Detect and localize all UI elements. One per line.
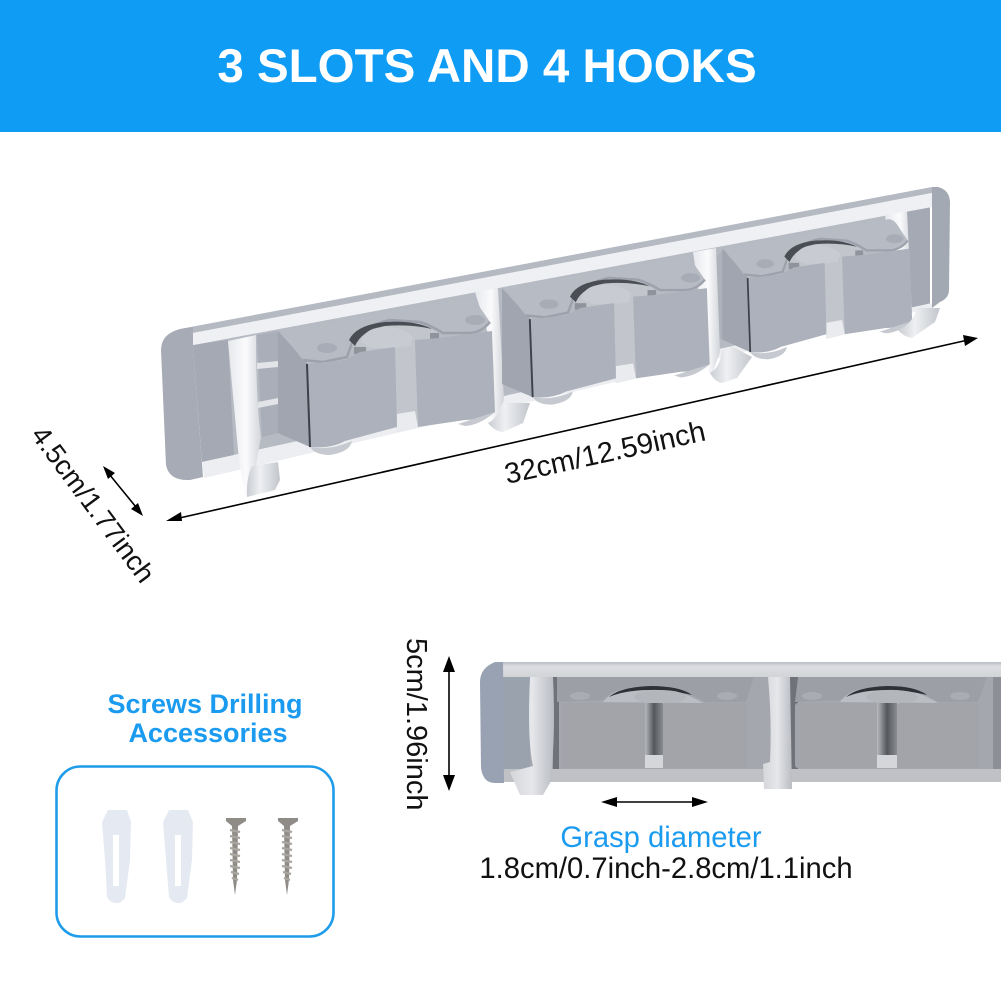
- length label: 32cm/12.59inch: [502, 416, 708, 491]
- hook 3 band: [693, 248, 720, 375]
- title: 3 SLOTS AND 4 HOOKS: [217, 40, 757, 93]
- right edge strip: [993, 677, 1001, 769]
- length dimension arrow: [166, 335, 978, 521]
- left end cap: [161, 327, 203, 480]
- accessories heading: Screws Drilling: [107, 689, 303, 719]
- screw 1: [226, 818, 246, 895]
- left jaw: [562, 703, 645, 768]
- hook 2 foot: [488, 403, 530, 432]
- hook 4 band: [885, 211, 912, 330]
- hook 4 foot: [898, 308, 940, 338]
- width dimension arrow: [103, 466, 143, 516]
- hook 1 band: [228, 335, 261, 497]
- back panel: [193, 207, 930, 462]
- main product: wall rack with three clips and hooks: [161, 187, 950, 497]
- left jaw: [795, 703, 877, 768]
- wall anchor 2: [163, 810, 193, 903]
- front view product: [480, 662, 1001, 795]
- title banner: [0, 0, 1001, 132]
- front rail and back: [498, 662, 1001, 677]
- accessories box: [56, 766, 334, 936]
- clip 1: [278, 298, 495, 455]
- right end cap: [932, 187, 950, 308]
- grasp arrow: [601, 797, 708, 807]
- screw 2: [278, 818, 298, 895]
- hook 1 foot: [247, 462, 280, 497]
- height dimension arrow: [443, 656, 455, 791]
- top rail strip: [180, 187, 932, 333]
- front clip 2: [795, 677, 987, 768]
- right jaw: [663, 703, 747, 768]
- hook 3 foot: [710, 347, 752, 383]
- grasp size: 1.8cm/0.7inch-2.8cm/1.1inch: [479, 853, 853, 885]
- bottom rail: [202, 303, 932, 478]
- bottom rail: [503, 769, 1001, 782]
- clip 3: [722, 219, 912, 359]
- end cap: [480, 662, 504, 783]
- accessories heading: Accessories: [128, 718, 288, 748]
- wall anchor 1: [102, 810, 131, 903]
- clip 2: [502, 257, 710, 405]
- front hook 2: [763, 677, 792, 789]
- right jaw: [897, 703, 979, 768]
- front hook 1: [510, 677, 554, 795]
- width label: 4.5cm/1.77inch: [25, 420, 161, 588]
- front clip 1: [557, 677, 754, 768]
- height label: 5cm/1.96inch: [400, 638, 432, 810]
- grasp label: Grasp diameter: [560, 822, 762, 854]
- hook 2 band: [475, 288, 504, 425]
- top rail: [193, 193, 932, 345]
